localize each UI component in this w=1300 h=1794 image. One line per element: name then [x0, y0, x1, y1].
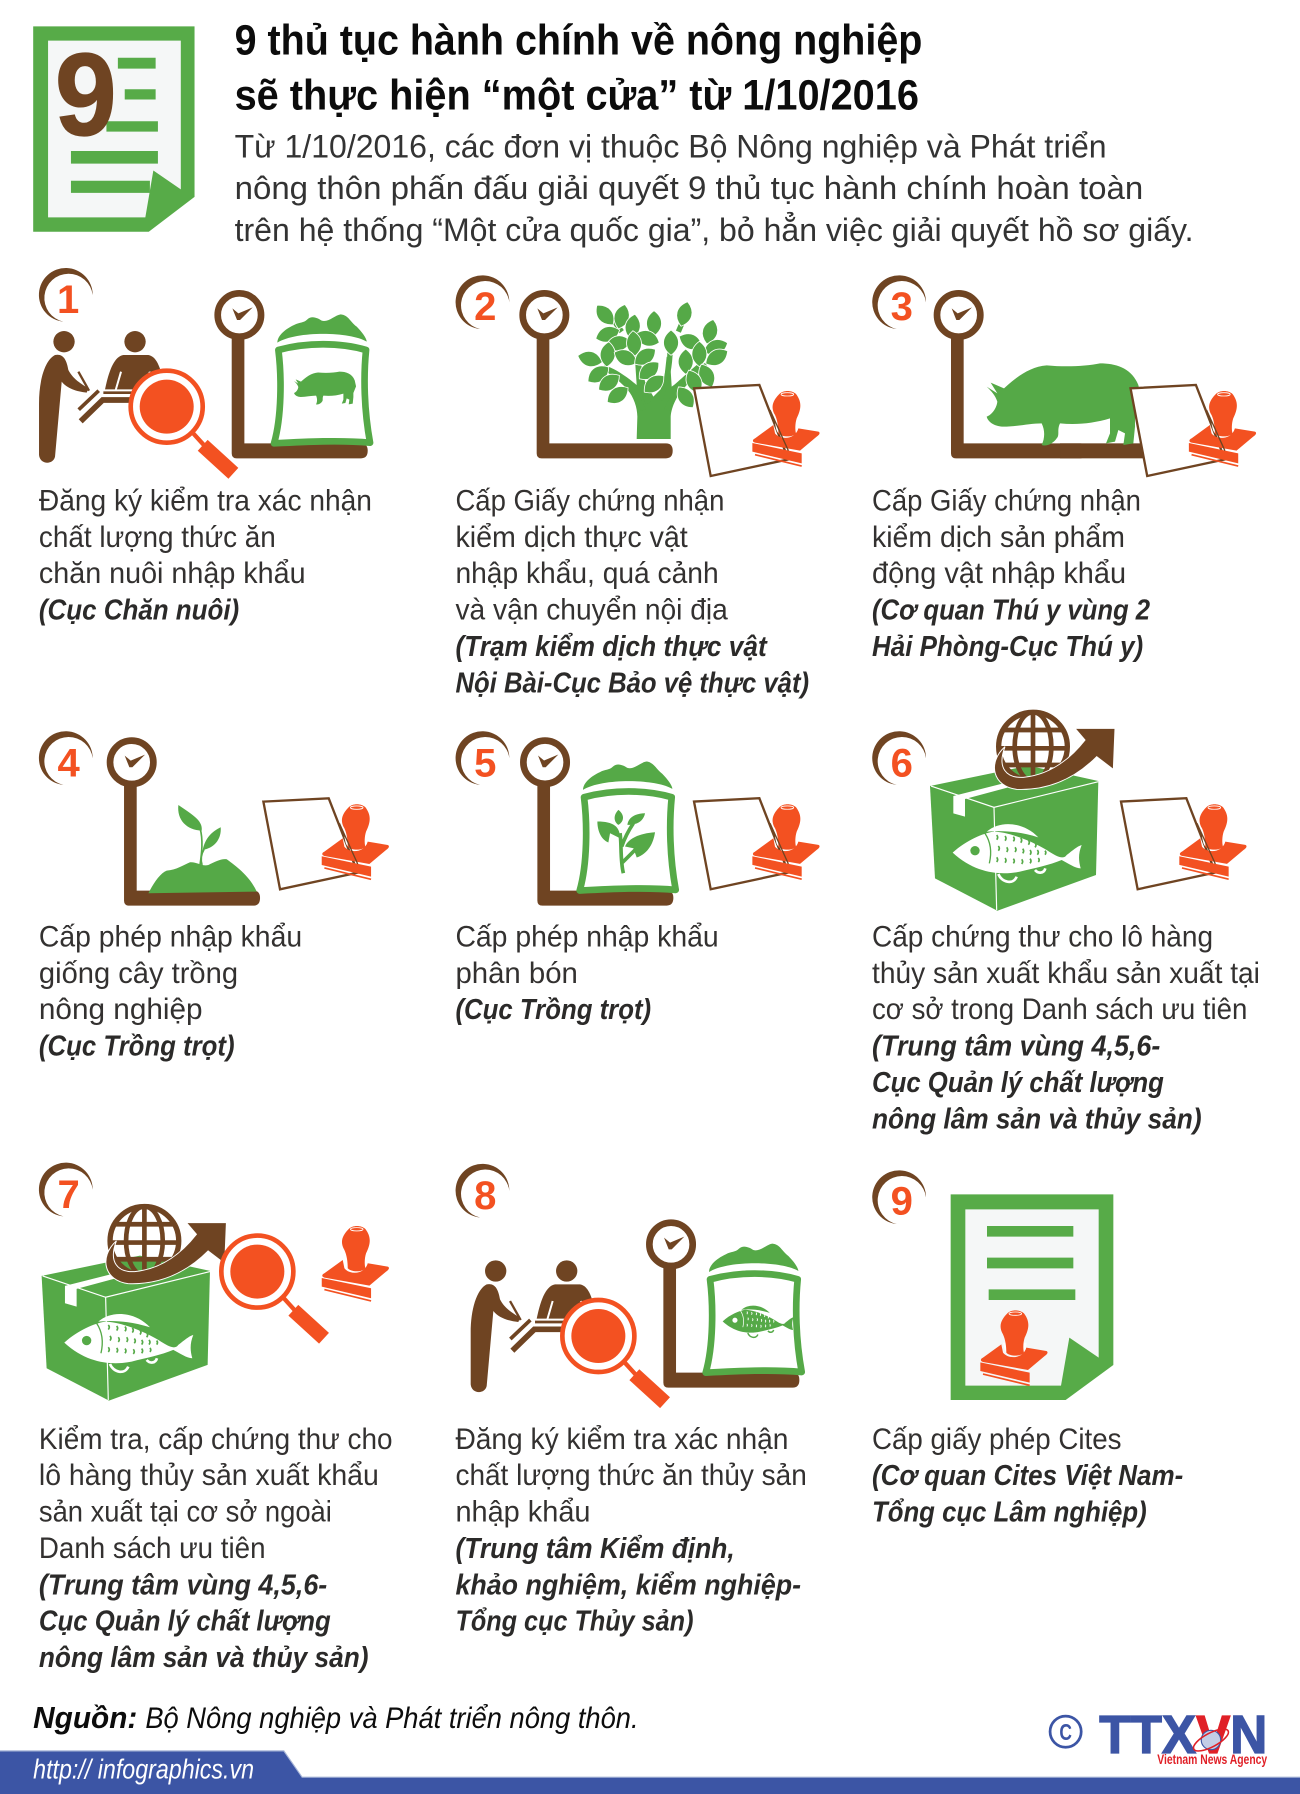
text: item 1: chất lượng thức ăn [39, 522, 276, 554]
text: item 8: Đăng ký kiểm tra xác nhận [455, 1424, 788, 1456]
text: item 5: Cấp phép nhập khẩu [455, 921, 719, 953]
icon: fish box with globe arrow [930, 712, 1115, 911]
footer bar with url: http:// infographics.vn [33, 1753, 254, 1784]
panel: item 5 [455, 731, 820, 1026]
text: item 4 [39, 921, 302, 1063]
number badge 9: 9 [891, 1180, 913, 1224]
icon: stamped paper 6 [1121, 798, 1247, 889]
number badge 8 [456, 1164, 509, 1218]
number badge 6 [872, 731, 926, 785]
text: item 3: Cấp Giấy chứng nhận [872, 485, 1141, 517]
text: item 6: Cục Quản lý chất lượng [872, 1067, 1164, 1099]
text: item 4: (Cục Trồng trọt) [39, 1031, 235, 1063]
text: item 9: (Cơ quan Cites Việt Nam- [872, 1460, 1183, 1492]
text: item 3 [872, 485, 1150, 663]
number badge 7 [39, 1163, 93, 1217]
text: item 6: (Trung tâm vùng 4,5,6- [872, 1031, 1160, 1063]
text: item 7: sản xuất tại cơ sở ngoài [39, 1497, 332, 1529]
panel: item 3 [872, 275, 1256, 663]
number badge 3 [872, 275, 926, 329]
text: item 2: Nội Bài-Cục Bảo vệ thực vật) [455, 667, 809, 699]
icon: magnifier [221, 1236, 324, 1338]
number badge 3: 3 [891, 285, 913, 329]
text: item 8: Tổng cục Thủy sản) [455, 1606, 693, 1638]
text: item 1: chăn nuôi nhập khẩu [39, 558, 306, 590]
text: item 9: Cấp giấy phép Cites [872, 1424, 1121, 1456]
text: item 7: nông lâm sản và thủy sản) [39, 1642, 368, 1674]
number badge 2: 2 [474, 285, 496, 329]
text: item 7: Kiểm tra, cấp chứng thư cho [39, 1424, 393, 1456]
text: item 4: Cấp phép nhập khẩu [39, 921, 302, 953]
text: item 2 [455, 485, 809, 699]
icon: scale with fertilizer bag [523, 741, 676, 906]
title: 9 thủ tục hành chính về nông nghiệp [235, 16, 922, 63]
intro text: trên hệ thống “Một cửa quốc gia”, bỏ hẳn việc giải quyết hồ sơ giấy. [235, 212, 1194, 248]
icon: stamped paper 5 [694, 798, 820, 889]
number badge 1 [39, 268, 93, 322]
text: item 7: Danh sách ưu tiên [39, 1533, 265, 1565]
text: item 7 [39, 1424, 393, 1674]
text: item 9: Tổng cục Lâm nghiệp) [872, 1497, 1147, 1529]
title [235, 16, 922, 118]
header icon: document with number 9: 9 [55, 29, 117, 160]
number badge 8: 8 [474, 1174, 496, 1218]
panel: item 4 [39, 731, 389, 1063]
logo: TTXVN: TTXVN [1099, 1706, 1267, 1765]
text: item 1: Đăng ký kiểm tra xác nhận [39, 485, 372, 517]
icon: people, magnifier and scale with fish bag [471, 1223, 802, 1403]
number badge 1: 1 [57, 278, 79, 322]
source note: Bộ Nông nghiệp và Phát triển nông thôn. [145, 1702, 639, 1735]
intro text: nông thôn phấn đấu giải quyết 9 thủ tục hành chính hoàn toàn [235, 170, 1143, 206]
text: item 6: Cấp chứng thư cho lô hàng [872, 921, 1213, 953]
panel: item 9 [872, 1170, 1183, 1529]
icon: scale with seedling and stamped paper [110, 741, 389, 906]
text: item 6 [872, 921, 1260, 1135]
footer bar with url [0, 1751, 1300, 1794]
text: item 8: (Trung tâm Kiểm định, [455, 1533, 735, 1565]
text: item 2: Cấp Giấy chứng nhận [455, 485, 724, 517]
text: item 3: động vật nhập khẩu [872, 558, 1126, 590]
number badge 4 [39, 731, 93, 785]
text: item 9 [872, 1424, 1183, 1529]
text: item 6: cơ sở trong Danh sách ưu tiên [872, 994, 1247, 1026]
header icon: document with number 9 [33, 26, 195, 232]
text: item 8: khảo nghiệm, kiểm nghiệp- [455, 1569, 801, 1601]
icon: scale with tree and stamped paper [523, 293, 820, 476]
icon: scale with pig and stamped paper [937, 293, 1256, 476]
text: item 4: giống cây trồng [39, 958, 238, 990]
text: item 5 [455, 921, 719, 1026]
panel: item 2 [455, 275, 820, 699]
text: item 3: Hải Phòng-Cục Thú y) [872, 631, 1143, 663]
logo: TTXVN: Vietnam News Agency [1157, 1752, 1267, 1767]
text: item 1: (Cục Chăn nuôi) [39, 595, 239, 627]
text: item 2: kiểm dịch thực vật [455, 522, 688, 554]
text: item 5: (Cục Trồng trọt) [455, 994, 651, 1026]
icon: people, magnifier and scale with feed bag [39, 293, 370, 473]
number badge 9 [872, 1170, 926, 1224]
text: item 8 [455, 1424, 807, 1638]
text: item 6: thủy sản xuất khẩu sản xuất tại [872, 958, 1260, 990]
number badge 7: 7 [58, 1173, 80, 1217]
source note: Nguồn: [33, 1700, 137, 1735]
icon: certificate with stamp [951, 1194, 1113, 1400]
text: item 2: (Trạm kiểm dịch thực vật [455, 631, 768, 663]
text: item 8: nhập khẩu [455, 1497, 590, 1529]
number badge 5: 5 [474, 741, 496, 785]
text: item 7: lô hàng thủy sản xuất khẩu [39, 1460, 379, 1492]
text: item 5: phân bón [455, 958, 578, 990]
text: item 6: nông lâm sản và thủy sản) [872, 1103, 1202, 1135]
panel: item 1 [39, 268, 372, 627]
intro text [235, 128, 1194, 248]
text: item 3: (Cơ quan Thú y vùng 2 [872, 595, 1150, 627]
panel: item 7 [39, 1163, 393, 1674]
number badge 4: 4 [58, 741, 81, 785]
intro text: Từ 1/10/2016, các đơn vị thuộc Bộ Nông nghiệp và Phát triển [235, 128, 1107, 164]
text: item 7: (Trung tâm vùng 4,5,6- [39, 1569, 327, 1601]
text: item 4: nông nghiệp [39, 994, 203, 1026]
text: item 2: nhập khẩu, quá cảnh [455, 558, 719, 590]
title: sẽ thực hiện “một cửa” từ 1/10/2016 [235, 71, 919, 118]
text: item 8: chất lượng thức ăn thủy sản [455, 1460, 807, 1492]
text: item 7: Cục Quản lý chất lượng [39, 1606, 331, 1638]
icon: stamp [322, 1226, 389, 1301]
text: item 3: kiểm dịch sản phẩm [872, 522, 1125, 554]
panel: item 8 [455, 1164, 807, 1638]
number badge 6: 6 [891, 741, 913, 785]
text: item 1 [39, 485, 372, 627]
number badge 2 [456, 275, 509, 329]
logo: TTXVN: C [1059, 1719, 1072, 1745]
panel: item 6 [872, 712, 1260, 1135]
text: item 2: và vận chuyển nội địa [455, 595, 729, 627]
icon: fish box with globe arrow [42, 1206, 226, 1401]
number badge 5 [456, 731, 509, 785]
